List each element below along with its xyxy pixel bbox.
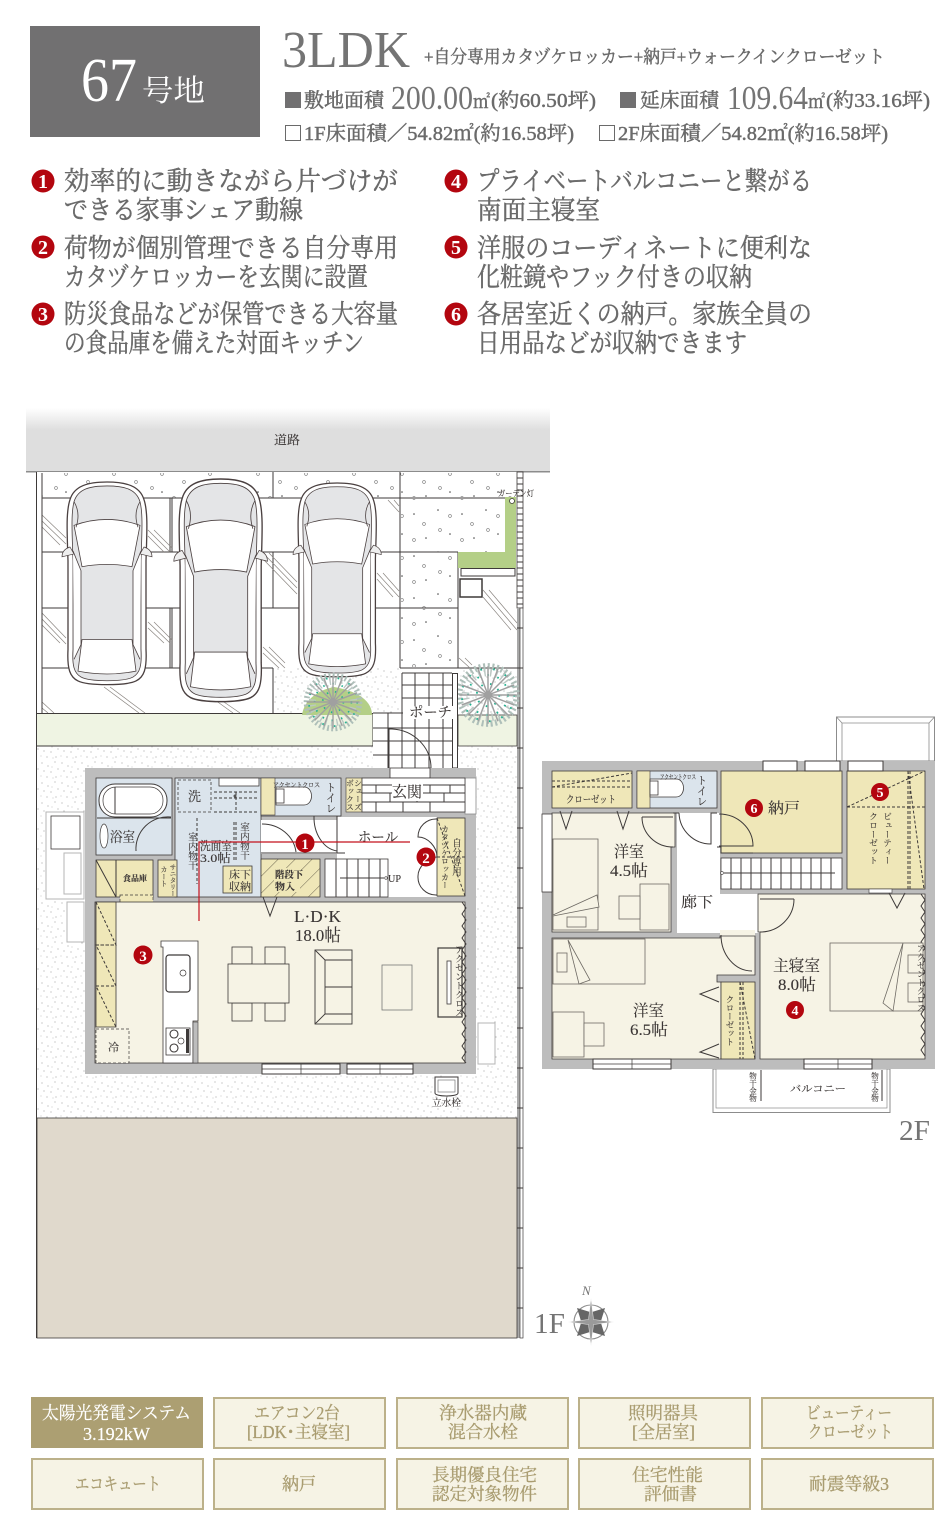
outdoor faucet: 立水栓 xyxy=(432,1097,461,1109)
badge 3 xyxy=(134,946,152,965)
site and total floor area: ㎡ xyxy=(808,92,825,112)
sanitary storage: カート xyxy=(160,866,168,887)
room 6.5 tatami xyxy=(552,935,755,1059)
lot number badge: 号地 xyxy=(142,75,205,108)
shoe box: シューズ xyxy=(354,779,362,811)
site and total floor area: ㎡ xyxy=(473,92,490,112)
feature 6 xyxy=(444,300,812,358)
balcony: バルコニー xyxy=(790,1084,846,1095)
tag: performance evaluation xyxy=(579,1459,750,1509)
LDK: L·D·K xyxy=(294,907,342,926)
feature 1: 効率的に動きながら片づけが xyxy=(64,167,398,196)
feature list xyxy=(32,167,812,358)
room 4.5 tatami: 洋室 xyxy=(614,843,644,861)
tag: long-life housing: 認定対象物件 xyxy=(432,1484,537,1504)
plan type heading xyxy=(282,22,885,79)
site and total floor area: 敷地面積 xyxy=(304,89,386,112)
corridor xyxy=(642,813,760,937)
washroom: 洗 xyxy=(188,789,201,804)
toilet 2F xyxy=(637,771,717,808)
storage room: 6 xyxy=(750,802,758,817)
feature 6: 6 xyxy=(451,304,461,326)
beauty closet: クローゼット xyxy=(868,812,878,865)
car 3 xyxy=(293,483,381,677)
feature 2: 2 xyxy=(38,237,48,259)
plan type heading: 3LDK xyxy=(282,22,410,79)
road: 道路 xyxy=(274,433,300,447)
label 1F: 1F xyxy=(534,1309,565,1340)
under-stairs storage: 物入 xyxy=(275,881,296,893)
bathroom xyxy=(96,778,172,855)
tree left xyxy=(302,676,372,728)
site and total floor area: (約60.50坪) xyxy=(491,89,596,112)
compass: N xyxy=(581,1283,592,1298)
washroom: 室内物干 xyxy=(238,821,250,861)
feature 5: 洋服のコーディネートに便利な xyxy=(477,234,812,263)
equipment tags xyxy=(31,1397,933,1509)
master bedroom: 8.0帖 xyxy=(778,976,816,994)
feature 4 xyxy=(444,167,812,225)
plan type heading: +自分専用カタヅケロッカー+納戸+ウォークインクローゼット xyxy=(424,47,885,67)
toilet 1F: トイレ xyxy=(324,782,336,814)
lawn strips xyxy=(36,714,517,746)
tag: performance evaluation: 住宅性能 xyxy=(632,1465,703,1485)
feature 1: 1 xyxy=(38,171,48,193)
lot number badge: 67 xyxy=(81,47,137,115)
washroom: 室内物干 xyxy=(186,831,198,871)
sanitary storage: サニタリー xyxy=(168,864,176,896)
porch xyxy=(373,673,458,768)
washroom: 3.0帖 xyxy=(200,850,231,865)
tag: seismic grade xyxy=(762,1459,933,1509)
feature 6: 各居室近くの納戸。家族全員の xyxy=(477,300,812,329)
locker: カタヅケロッカー xyxy=(440,825,450,889)
tag: long-life housing xyxy=(397,1459,568,1509)
feature 3: の食品庫を備えた対面キッチン xyxy=(64,329,364,358)
site and total floor area: 200.00 xyxy=(391,80,473,117)
feature 4: 4 xyxy=(451,171,461,193)
low table xyxy=(382,965,412,1010)
sanitary storage xyxy=(158,860,177,897)
road xyxy=(26,408,550,472)
washroom xyxy=(175,778,261,897)
outdoor units xyxy=(46,812,495,1064)
LDK: 18.0帖 xyxy=(295,926,341,945)
compass xyxy=(568,1283,614,1346)
under-stairs storage: 階段下 xyxy=(275,869,303,881)
storage room xyxy=(721,771,842,853)
tag: air conditioner xyxy=(214,1398,385,1448)
tag: lighting: [全居室] xyxy=(632,1422,695,1442)
rear garden xyxy=(37,1118,517,1338)
master bedroom: 主寝室 xyxy=(773,956,820,975)
master bedroom xyxy=(758,893,926,1059)
storage room: 納戸 xyxy=(768,800,800,817)
tag: solar: 太陽光発電システム xyxy=(42,1403,191,1423)
planting strip and garden lamp xyxy=(458,488,534,597)
roof ledge xyxy=(836,717,934,761)
entrance xyxy=(362,778,465,812)
tag: solar: 3.192kW xyxy=(83,1424,150,1444)
porch: ポーチ xyxy=(409,705,452,721)
floor plan 1F site xyxy=(36,472,534,1338)
under-stairs storage xyxy=(261,859,320,897)
site and total floor area xyxy=(285,80,930,117)
per-floor area: 1F床面積／54.82㎡(約16.58坪) xyxy=(304,122,574,145)
tag: storage: 納戸 xyxy=(282,1474,316,1494)
tag: lighting xyxy=(579,1398,750,1448)
LDK xyxy=(95,897,466,1063)
stairs 1F: UP xyxy=(388,874,401,885)
master bedroom: アクセントクロス xyxy=(916,944,926,1012)
beauty closet: 5 xyxy=(876,786,884,801)
per-floor area xyxy=(286,122,888,145)
feature 3 xyxy=(32,300,398,358)
tv board: アクセントクロス xyxy=(454,945,464,1017)
tag: performance evaluation: 評価書 xyxy=(644,1484,697,1504)
room 4.5 tatami xyxy=(552,811,675,932)
tag: eco cute: エコキュート xyxy=(75,1474,161,1494)
per-floor area: 2F床面積／54.82㎡(約16.58坪) xyxy=(618,122,888,145)
closet in room 6.5 xyxy=(721,982,755,1059)
tag: seismic grade: 耐震等級3 xyxy=(809,1474,889,1494)
feature 5 xyxy=(444,234,812,292)
badge 3: 3 xyxy=(139,949,147,965)
washroom: 床下 xyxy=(229,868,252,881)
tag: beauty closet: クローゼット xyxy=(808,1422,893,1442)
room 6.5 tatami: 洋室 xyxy=(633,1002,664,1020)
kitchen shelf xyxy=(96,902,116,1027)
locker xyxy=(418,818,465,896)
car 1 xyxy=(62,482,152,685)
hall: ホール xyxy=(358,830,398,846)
red circulation line with badge 1 xyxy=(199,834,410,921)
badge 2: 2 xyxy=(422,851,430,867)
beauty closet: ビューティー xyxy=(882,812,892,865)
feature 5: 5 xyxy=(451,237,461,259)
gravel beds xyxy=(37,668,517,1118)
kitchen counter xyxy=(161,941,198,1063)
washroom: 収納 xyxy=(229,880,252,893)
LDK windows xyxy=(262,1064,413,1074)
locker: 自分専用 xyxy=(450,837,462,877)
feature 4: 南面主寝室 xyxy=(477,196,600,225)
toilet 1F xyxy=(261,778,341,816)
shoe box: ボックス xyxy=(346,779,354,811)
lot number badge xyxy=(30,26,260,137)
shoe box xyxy=(346,778,362,812)
room 4.5 window xyxy=(542,814,552,892)
tv board xyxy=(438,945,464,1017)
room 4.5 tatami: 4.5帖 xyxy=(610,862,648,880)
pantry: 食品庫 xyxy=(123,873,147,883)
feature 6: 日用品などが収納できます xyxy=(477,329,747,358)
fridge xyxy=(96,1029,129,1063)
washroom: 洗面室 xyxy=(200,838,232,853)
car 2 xyxy=(174,479,267,702)
feature 5: 化粧鏡やフック付きの収納 xyxy=(477,263,752,292)
fridge: 冷 xyxy=(108,1041,119,1054)
floor plan 2F xyxy=(542,717,935,1112)
room 6.5 tatami: 6.5帖 xyxy=(630,1021,668,1039)
tag: air conditioner: [LDK･主寝室] xyxy=(247,1422,350,1442)
tag: water filter: 混合水栓 xyxy=(448,1422,518,1442)
stairs 2F xyxy=(702,858,842,889)
feature 2: 荷物が個別管理できる自分専用 xyxy=(64,234,398,263)
yard boundary strip xyxy=(517,608,523,1338)
stairs 1F xyxy=(325,859,401,897)
closet top left: クローゼット xyxy=(566,794,616,806)
site and total floor area: 109.64 xyxy=(727,80,808,117)
red circulation line with badge 1: 1 xyxy=(301,837,309,853)
tag: beauty closet: ビューティー xyxy=(806,1403,892,1423)
tree right xyxy=(459,666,517,724)
tag: lighting: 照明器具 xyxy=(628,1403,699,1423)
tag: eco cute xyxy=(32,1459,203,1509)
windows 2F xyxy=(593,761,883,1069)
sofa xyxy=(315,950,352,1024)
site and total floor area: 延床面積 xyxy=(640,89,721,112)
beauty closet xyxy=(847,771,925,893)
tag: water filter xyxy=(397,1398,568,1448)
balcony: 物干金物 xyxy=(748,1071,758,1103)
corridor: 廊下 xyxy=(681,893,713,911)
site and total floor area: (約33.16坪) xyxy=(826,89,930,112)
closet in room 6.5: クローゼット xyxy=(725,995,735,1046)
tag: storage xyxy=(214,1459,385,1509)
feature 3: 防災食品などが保管できる大容量 xyxy=(64,300,398,329)
tag: air conditioner: エアコン2台 xyxy=(254,1403,340,1423)
hall xyxy=(261,816,437,897)
stairs 2F: DN xyxy=(702,869,717,880)
tag: long-life housing: 長期優良住宅 xyxy=(432,1465,537,1485)
toilet 1F: アクセントクロス xyxy=(273,781,320,789)
bathroom: 浴室 xyxy=(110,829,135,846)
house shell 2F xyxy=(542,761,935,1069)
feature 3: 3 xyxy=(38,304,48,326)
dining set xyxy=(228,947,289,1021)
feature 4: プライベートバルコニーと繋がる xyxy=(477,167,812,196)
tag: beauty closet xyxy=(762,1398,933,1448)
closet top left xyxy=(552,771,632,808)
master bedroom: 4 xyxy=(792,1004,798,1019)
outdoor faucet xyxy=(432,1077,461,1109)
planting strip and garden lamp: ガーデン灯 xyxy=(498,488,534,498)
feature 2: カタヅケロッカーを玄関に設置 xyxy=(64,263,368,292)
feature 2 xyxy=(32,234,398,292)
balcony xyxy=(713,1069,890,1112)
tag: solar xyxy=(31,1397,203,1448)
balcony: 物干金物 xyxy=(870,1071,880,1103)
feature 1 xyxy=(32,167,398,225)
entrance: 玄関 xyxy=(392,783,422,801)
badge 2 xyxy=(416,848,436,867)
toilet 2F: トイレ xyxy=(696,775,706,806)
pantry xyxy=(96,860,153,903)
house shell 1F xyxy=(85,768,476,1074)
parking paving xyxy=(36,472,523,1338)
toilet 2F: アクセントクロス xyxy=(660,773,696,781)
feature 1: できる家事シェア動線 xyxy=(64,196,303,225)
tag: water filter: 浄水器内蔵 xyxy=(439,1403,527,1423)
label 2F: 2F xyxy=(899,1116,930,1147)
